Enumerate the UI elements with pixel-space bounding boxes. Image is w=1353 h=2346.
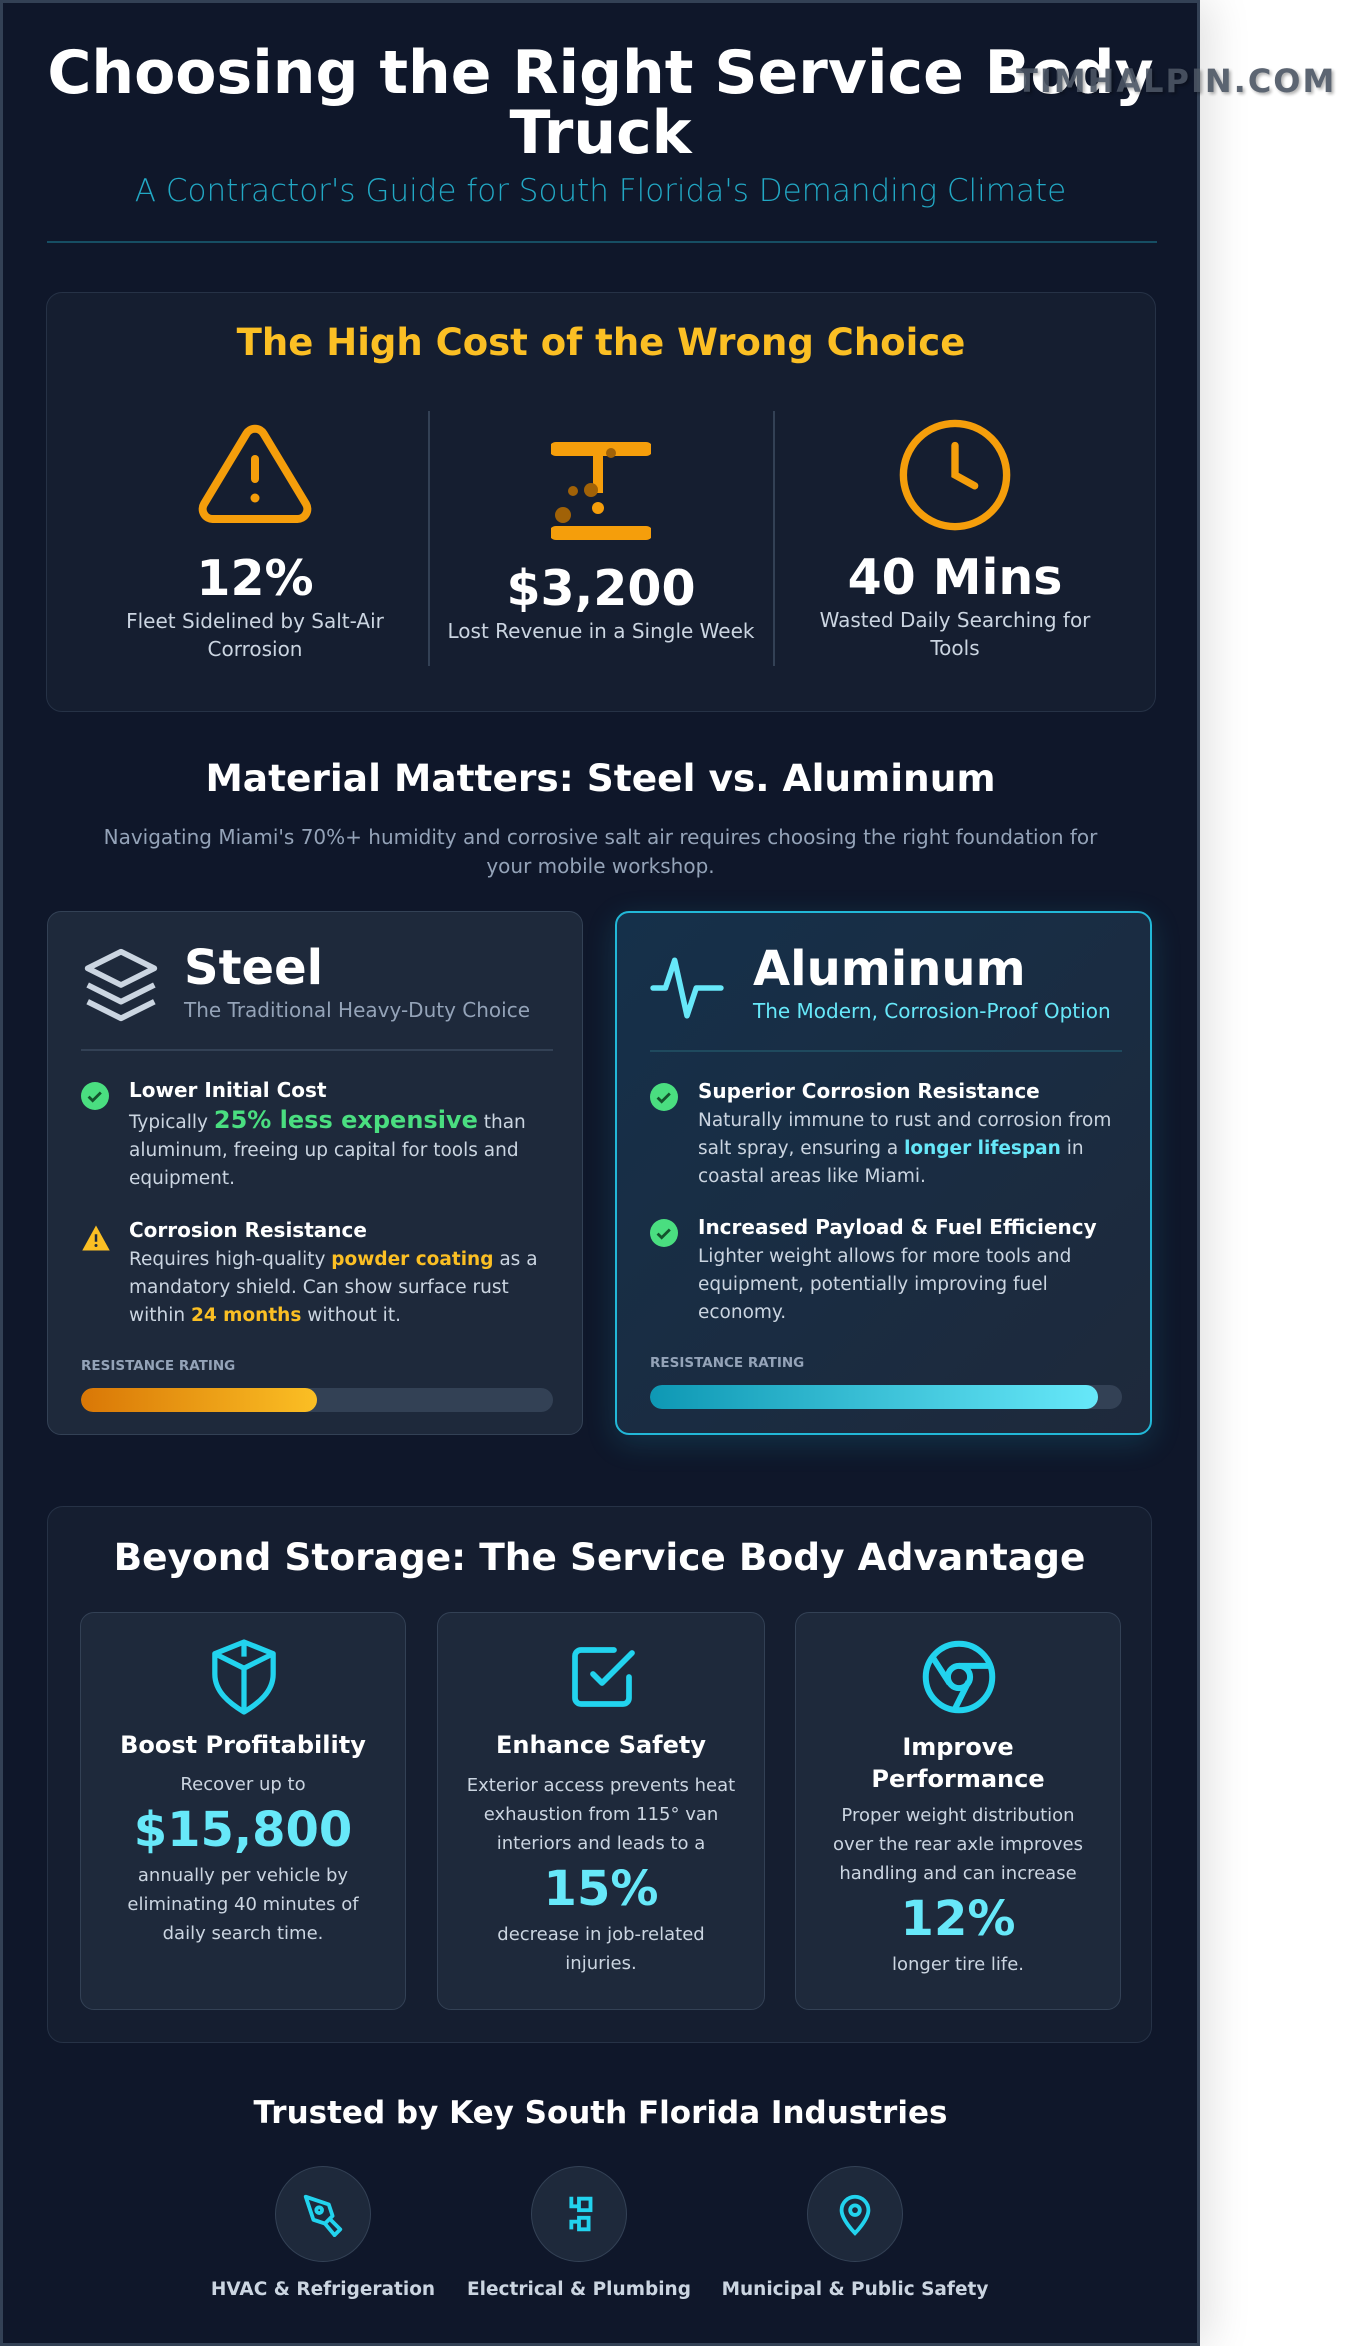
icon: shield bbox=[212, 1639, 276, 1715]
card: safety: interiors and leads to a bbox=[497, 1833, 705, 1854]
text: material intro: Navigating Miami's 70%+ humidity and corrosive salt air requires choosing the right foundation for your mobile workshop. bbox=[104, 825, 1097, 878]
stat: $3,200: $3,200 bbox=[506, 560, 696, 617]
card: safety: injuries. bbox=[565, 1953, 637, 1974]
stat: $3,200: Lost Revenue in a Single Week bbox=[448, 619, 754, 643]
card: aluminum bbox=[615, 911, 1152, 1435]
industry: hvac bbox=[211, 2166, 435, 2300]
card: performance: Improve bbox=[902, 1733, 1014, 1761]
watermark: TIMHALPIN.COM bbox=[1016, 62, 1336, 100]
heading: beyond storage: Beyond Storage: The Service Body Advantage bbox=[114, 1535, 1085, 1579]
stat: 12%: Fleet Sidelined by Salt-Air bbox=[126, 609, 384, 633]
subtitle: A Contractor's Guide for South Florida's Demanding Climate bbox=[135, 173, 1066, 209]
card: steel bbox=[47, 911, 583, 1435]
stat: 40 mins bbox=[820, 420, 1090, 660]
heading: material matters: Material Matters: Steel vs. Aluminum bbox=[205, 756, 996, 800]
stat: 12%: Corrosion bbox=[208, 637, 302, 661]
icon: checkbox bbox=[572, 1647, 635, 1707]
heading: steel: Steel bbox=[184, 940, 323, 996]
stat: 40 mins: Wasted Daily Searching for bbox=[820, 608, 1090, 632]
heading: trusted by: Trusted by Key South Florida Industries bbox=[254, 2095, 947, 2131]
item: corrosion bbox=[82, 1218, 538, 1326]
card: safety: exhaustion from 115° van bbox=[484, 1804, 718, 1825]
card: performance: over the rear axle improves bbox=[833, 1834, 1083, 1855]
icon: hourglass bbox=[551, 442, 651, 540]
card: profitability: eliminating 40 minutes of bbox=[127, 1894, 359, 1915]
item: corrosion resistance: Naturally immune to rust and corrosion from salt spray, ensuring a longer lifespan in coastal areas like Miami. bbox=[698, 1110, 1111, 1187]
industry: municipal: Municipal & Public Safety bbox=[722, 2279, 988, 2300]
resistance bar: aluminum bbox=[650, 1355, 1122, 1409]
card: performance: longer tire life. bbox=[892, 1954, 1024, 1975]
item: lower cost bbox=[81, 1078, 526, 1189]
icon: pulse bbox=[650, 958, 724, 1018]
heading: aluminum: Aluminum bbox=[753, 941, 1026, 997]
card: performance bbox=[795, 1612, 1121, 2010]
card: profitability: annually per vehicle by bbox=[138, 1865, 348, 1886]
item: corrosion resistance bbox=[650, 1079, 1111, 1187]
heading: high cost: The High Cost of the Wrong Choice bbox=[237, 321, 965, 364]
item: corrosion: Requires high-quality powder coating as a mandatory shield. Can show surface rust within 24 months without it. bbox=[129, 1249, 538, 1326]
title: Choosing the Right Service Body Truck bbox=[47, 38, 1154, 168]
card: safety: decrease in job-related bbox=[497, 1924, 705, 1945]
panel: advantages bbox=[47, 1506, 1152, 2043]
card: safety: Enhance Safety bbox=[496, 1731, 706, 1759]
card: safety: Exterior access prevents heat bbox=[467, 1775, 735, 1796]
item: payload: Increased Payload & Fuel Efficiency bbox=[698, 1215, 1097, 1239]
icon: chrome-like circle bbox=[922, 1640, 996, 1714]
stat: 12%: 12% bbox=[196, 550, 314, 607]
card: performance: Proper weight distribution bbox=[841, 1805, 1075, 1826]
item: corrosion resistance: Superior Corrosion Resistance bbox=[698, 1079, 1040, 1103]
resistance bar: aluminum: RESISTANCE RATING bbox=[650, 1355, 804, 1371]
card: profitability: Recover up to bbox=[180, 1774, 306, 1795]
item: payload: Lighter weight allows for more tools and equipment, potentially improving fuel economy. bbox=[698, 1246, 1071, 1323]
stat: 40 mins: 40 Mins bbox=[848, 549, 1062, 606]
card: profitability: Boost Profitability bbox=[120, 1731, 366, 1759]
industry: electrical: Electrical & Plumbing bbox=[467, 2279, 691, 2300]
icon: clock bbox=[900, 420, 1010, 530]
card: performance: Performance bbox=[871, 1765, 1045, 1793]
industry: hvac: HVAC & Refrigeration bbox=[211, 2279, 435, 2300]
card: performance: handling and can increase bbox=[839, 1863, 1077, 1884]
stat: 40 mins: Tools bbox=[930, 636, 980, 660]
panel: high cost bbox=[46, 292, 1156, 712]
industry: municipal bbox=[722, 2166, 988, 2300]
card: profitability bbox=[80, 1612, 406, 2010]
card: steel: The Traditional Heavy-Duty Choice bbox=[184, 998, 530, 1022]
icon: layers bbox=[84, 948, 158, 1022]
card: aluminum: The Modern, Corrosion-Proof Option bbox=[753, 999, 1111, 1023]
card: safety: 15% bbox=[544, 1861, 658, 1917]
resistance bar: steel: RESISTANCE RATING bbox=[81, 1358, 235, 1374]
resistance bar: steel bbox=[81, 1358, 553, 1412]
item: lower cost: Typically 25% less expensive than aluminum, freeing up capital for tools and equipment. bbox=[129, 1106, 526, 1189]
item: lower cost: Lower Initial Cost bbox=[129, 1078, 326, 1102]
icon: warning bbox=[198, 424, 312, 523]
item: payload bbox=[650, 1215, 1097, 1323]
card: safety bbox=[437, 1612, 765, 2010]
stat: $3,200 bbox=[448, 442, 754, 643]
industry: electrical bbox=[467, 2166, 691, 2300]
item: corrosion: Corrosion Resistance bbox=[129, 1218, 367, 1242]
card: performance: 12% bbox=[901, 1891, 1015, 1947]
stat: 12% bbox=[126, 424, 384, 661]
card: profitability: $15,800 bbox=[134, 1802, 352, 1858]
card: profitability: daily search time. bbox=[163, 1923, 323, 1944]
